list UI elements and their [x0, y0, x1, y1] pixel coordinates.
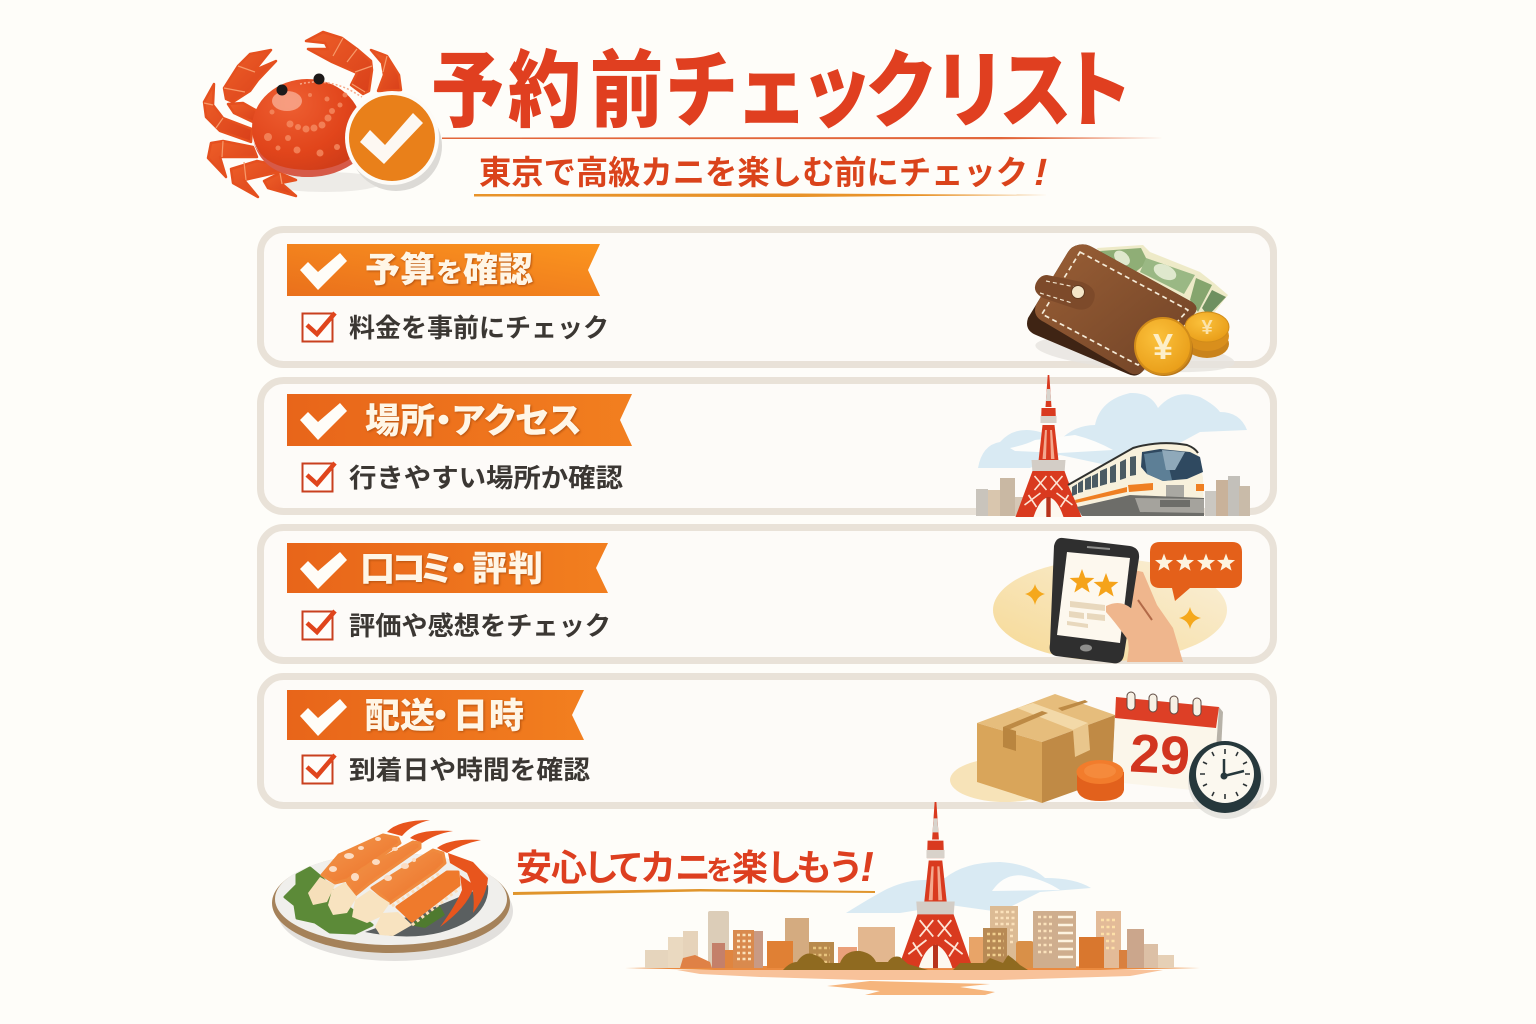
- checklist item: 評価や感想をチェック: [349, 611, 611, 641]
- closing message: [516, 843, 879, 890]
- panel: delivery and date: [260, 676, 1274, 819]
- panel: budget: [260, 230, 1274, 379]
- illustration: crab legs on plate: [272, 820, 513, 961]
- checklist item: 到着日や時間を確認: [349, 755, 590, 785]
- illustration: Tokyo skyline: [625, 802, 1200, 995]
- card frame: [260, 380, 1274, 512]
- illustration: Tokyo Tower: [1016, 375, 1082, 517]
- illustration: buildings left: [976, 478, 1025, 516]
- footer: [272, 802, 1200, 995]
- icon: wallet with cash and coins: ¥: [1153, 326, 1173, 367]
- illustration: phone with review bubble: [993, 538, 1242, 663]
- illustration: cardboard box: [950, 694, 1115, 803]
- closing message: を: [706, 856, 733, 886]
- illustration: train: [1068, 443, 1204, 516]
- checklist item: 行きやすい場所か確認: [349, 463, 623, 493]
- illustration: clouds: [978, 393, 1247, 470]
- header: [204, 32, 1164, 197]
- closing underline: [513, 889, 875, 895]
- subtitle: 東京で高級カニを楽しむ前にチェック: [479, 154, 1028, 191]
- illustration: buildings right: [1205, 476, 1250, 516]
- illustration: calendar: 29: [1128, 723, 1192, 787]
- title rule: [442, 137, 1164, 139]
- panel: location and access: [260, 375, 1274, 517]
- illustration: cloud highlight: [1010, 435, 1113, 453]
- closing message: 楽しもう: [732, 847, 864, 888]
- ribbon heading: を: [436, 258, 463, 288]
- ribbon heading: 場所・アクセス: [365, 402, 582, 441]
- icon: wallet with cash and coins: ¥: [1201, 317, 1213, 339]
- illustration: clock: [1188, 741, 1264, 819]
- illustration: orange lid: [1076, 760, 1124, 801]
- ribbon heading: [287, 690, 584, 740]
- ribbon heading: 確認: [463, 251, 533, 290]
- card frame: [260, 676, 1274, 806]
- card frame: [260, 528, 1274, 660]
- icon: crab with check badge: [204, 32, 442, 197]
- ribbon heading: 配送・日時: [365, 697, 524, 736]
- ribbon heading: 口コミ・評判: [360, 550, 543, 589]
- icon: wallet with cash and coins: [1027, 244, 1236, 379]
- ribbon heading: [287, 244, 600, 296]
- card frame: [260, 230, 1274, 364]
- title: 予約前チェックリスト: [431, 44, 1133, 138]
- subtitle underline: [474, 194, 1048, 197]
- illustration: calendar: [1112, 692, 1223, 792]
- ribbon heading: 予算: [365, 251, 435, 290]
- closing message: !: [856, 843, 879, 890]
- closing message: 安心してカニ: [516, 847, 711, 888]
- panel: reviews: [260, 528, 1274, 663]
- ribbon heading: [287, 543, 608, 593]
- ribbon heading: [287, 394, 632, 446]
- checklist item: 料金を事前にチェック: [349, 313, 609, 343]
- subtitle: !: [1030, 151, 1052, 194]
